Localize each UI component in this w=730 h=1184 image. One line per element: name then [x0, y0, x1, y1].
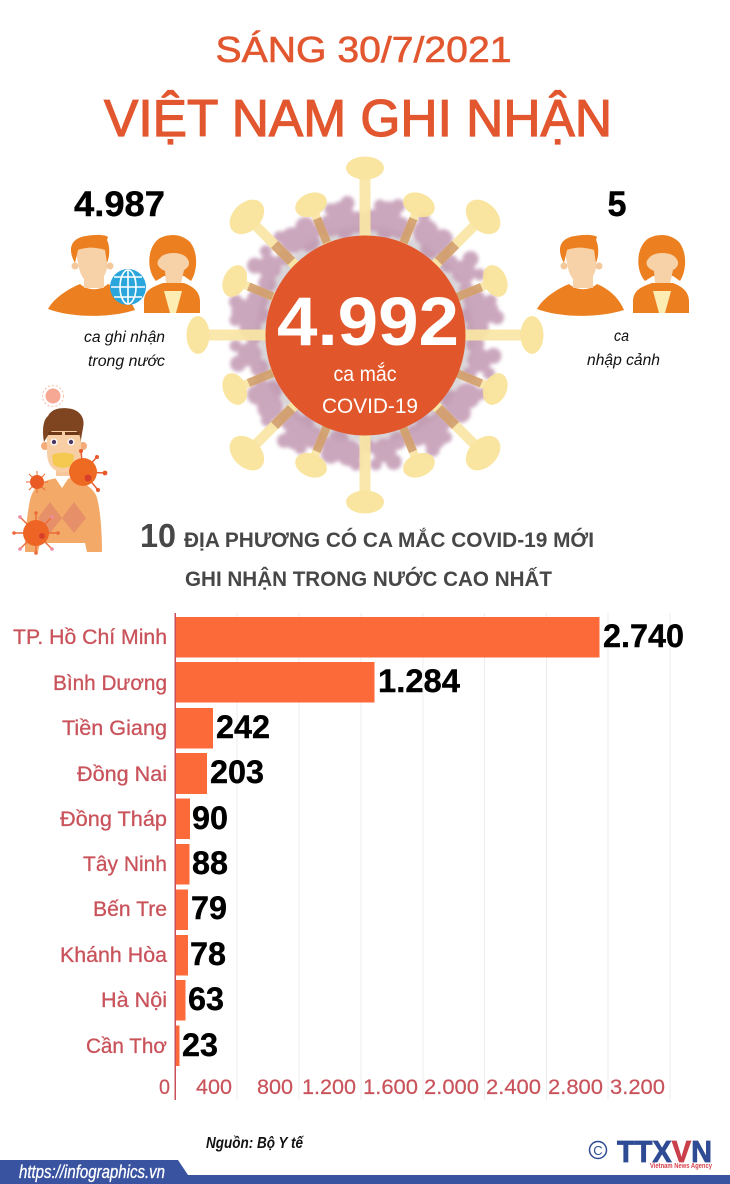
axis labels: 400: [196, 1076, 232, 1099]
total caption line 1: ca mắc: [334, 363, 396, 386]
caption: domestic: trong nước: [88, 353, 165, 370]
caption: domestic: [84, 329, 165, 370]
chart heading: [140, 517, 594, 591]
woman: [633, 235, 689, 313]
axis labels: 2.400: [486, 1076, 541, 1099]
axis labels: [159, 1076, 665, 1099]
title: main heading: VIỆT NAM GHI NHẬN: [104, 90, 612, 148]
man: [48, 235, 135, 316]
axis labels: 3.200: [610, 1076, 665, 1099]
category labels: Cần Thơ: [86, 1034, 167, 1058]
virus spikes: [186, 156, 544, 514]
value labels: 90: [192, 800, 228, 836]
bars: [175, 617, 600, 1066]
category labels: Hà Nội: [101, 988, 167, 1012]
bar chart: [13, 613, 684, 1100]
copyright symbol: C: [593, 1143, 603, 1158]
red circle: [266, 236, 466, 436]
axis labels: 0: [159, 1076, 170, 1099]
value labels: 242: [216, 709, 270, 745]
footer bar: [0, 1160, 730, 1184]
axis labels: 2.800: [548, 1076, 603, 1099]
value labels: 79: [191, 890, 227, 926]
total number: 4.992: [277, 283, 459, 360]
value labels: 2.740: [603, 618, 684, 654]
value labels: 1.284: [378, 663, 460, 699]
floating pale virus: [42, 386, 64, 406]
virus bottom: [12, 511, 60, 555]
chart heading: GHI NHẬN TRONG NƯỚC CAO NHẤT: [185, 567, 552, 591]
value labels: 23: [182, 1027, 218, 1063]
value labels: 63: [188, 981, 224, 1017]
axis labels: 1.600: [363, 1076, 418, 1099]
logo wordmark: TTXVN: [617, 1134, 712, 1169]
woman: [144, 235, 200, 313]
caption: imported: ca: [614, 328, 629, 345]
virus left: [26, 471, 48, 493]
value labels: 78: [190, 936, 226, 972]
category labels: Tiền Giang: [62, 716, 167, 740]
title: date: SÁNG 30/7/2021: [216, 29, 512, 70]
category labels: Bình Dương: [53, 671, 167, 695]
imported count: 5: [608, 185, 626, 224]
source: Nguồn: Bộ Y tế: [206, 1135, 304, 1152]
icon: sick person with mask and viruses: [12, 386, 107, 555]
icon: domestic people with globe: [48, 235, 200, 316]
grid lines: [237, 613, 670, 1100]
chart heading: ĐỊA PHƯƠNG CÓ CA MẮC COVID-19 MỚI: [184, 528, 594, 552]
virus protein blobs: [223, 193, 507, 475]
caption: imported: [587, 328, 660, 369]
category labels: Đồng Nai: [77, 762, 167, 786]
virus illustration with total: [186, 156, 544, 514]
caption: imported: nhập cảnh: [587, 352, 660, 369]
value labels: 203: [210, 754, 264, 790]
axis labels: 2.000: [424, 1076, 479, 1099]
axis labels: 1.200: [302, 1076, 356, 1099]
logo tagline: Vietnam News Agency: [650, 1161, 713, 1170]
value labels: [182, 618, 684, 1063]
caption: domestic: ca ghi nhận: [84, 329, 165, 346]
axis line: [174, 613, 176, 1100]
category labels: [13, 625, 167, 1058]
axis labels: 800: [257, 1076, 293, 1099]
man: [537, 235, 624, 316]
icon: imported people: [537, 235, 689, 316]
chart heading: 10: [140, 517, 176, 554]
body: [25, 472, 102, 552]
category labels: Đồng Tháp: [60, 807, 167, 831]
category labels: Bến Tre: [93, 897, 167, 921]
globe: [110, 269, 146, 305]
total caption line 2: COVID-19: [322, 395, 418, 418]
category labels: Tây Ninh: [83, 852, 167, 876]
category labels: TP. Hồ Chí Minh: [13, 625, 167, 649]
head: [41, 408, 87, 476]
logo: TTXVN: [590, 1134, 713, 1170]
value labels: 88: [192, 845, 228, 881]
virus on shoulder: [69, 449, 107, 492]
footer url: https://infographics.vn: [19, 1162, 165, 1182]
domestic count: 4.987: [74, 185, 165, 224]
category labels: Khánh Hòa: [60, 943, 167, 967]
grey ring: [257, 227, 473, 443]
